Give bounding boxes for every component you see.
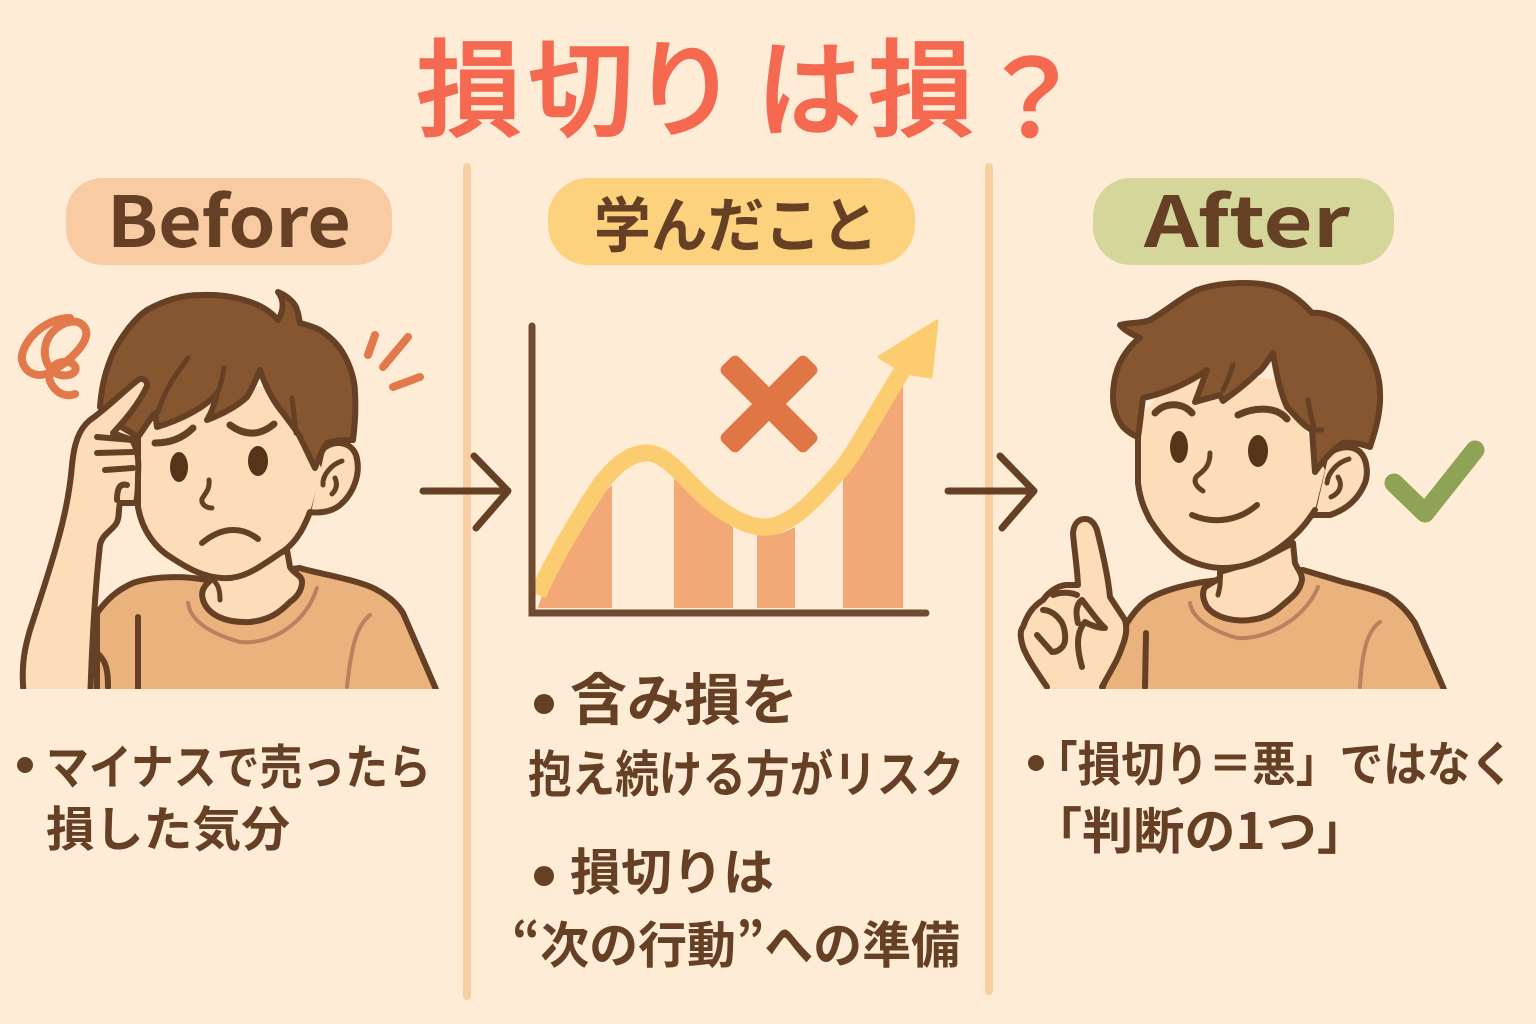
column divider right xyxy=(985,163,993,995)
heading: After: After xyxy=(1143,167,1351,268)
heading: Before: Before xyxy=(107,167,351,268)
neck xyxy=(202,550,302,622)
shirt xyxy=(97,568,442,705)
hair strands xyxy=(1223,365,1322,430)
axes xyxy=(532,326,926,613)
ear xyxy=(1312,447,1367,515)
arrow head xyxy=(879,321,937,377)
chart: loss and recovery xyxy=(532,321,937,613)
hair xyxy=(1113,283,1380,472)
sleeve and collar lines xyxy=(97,617,138,688)
character: worried person before xyxy=(22,292,442,705)
icon: confusion scribble xyxy=(22,318,86,395)
hair strands xyxy=(158,358,296,433)
arrow left xyxy=(423,456,508,528)
character: confident person after xyxy=(1021,283,1475,705)
finger lines xyxy=(97,437,133,500)
shirt xyxy=(1104,567,1447,689)
eyes and eyebrows xyxy=(170,452,188,482)
eyes, eyebrows, nose and smile xyxy=(1170,431,1188,463)
text block: lessons xyxy=(512,656,964,978)
ear xyxy=(308,443,358,512)
text block: before: 損した気分 xyxy=(46,790,290,860)
text block: lessons: 含み損を xyxy=(570,656,798,737)
hair xyxy=(100,292,355,468)
text block: lessons: “次の行動”への準備 xyxy=(512,906,960,978)
arrow right xyxy=(948,456,1034,528)
text block: before: マイナスで売ったら xyxy=(46,728,431,798)
text block: after xyxy=(1028,725,1514,864)
icon: green check xyxy=(1394,450,1475,513)
title: 損切りは損？ xyxy=(416,5,1084,168)
heading: 学んだこと: 学んだこと xyxy=(594,178,878,265)
face xyxy=(138,380,322,578)
finger curls xyxy=(1037,593,1105,667)
heading: Before xyxy=(66,167,392,268)
icon: red cross xyxy=(718,353,820,455)
text block: after: 「判断の1つ」 xyxy=(1031,792,1368,864)
neck xyxy=(1203,543,1302,620)
icon: stress marks xyxy=(368,335,420,387)
sleeve and collar lines xyxy=(1145,633,1146,687)
text block: lessons: 損切りは xyxy=(570,833,774,905)
raised finger hand xyxy=(1024,522,1124,689)
text block: lessons: 抱え続ける方がリスク xyxy=(528,735,964,807)
text block: before xyxy=(17,728,431,860)
trend curve xyxy=(538,370,903,595)
face xyxy=(1138,370,1325,568)
bars xyxy=(538,485,612,608)
arm and pointing hand xyxy=(23,379,147,705)
column divider left xyxy=(463,163,471,1000)
heading: After xyxy=(1093,167,1394,268)
